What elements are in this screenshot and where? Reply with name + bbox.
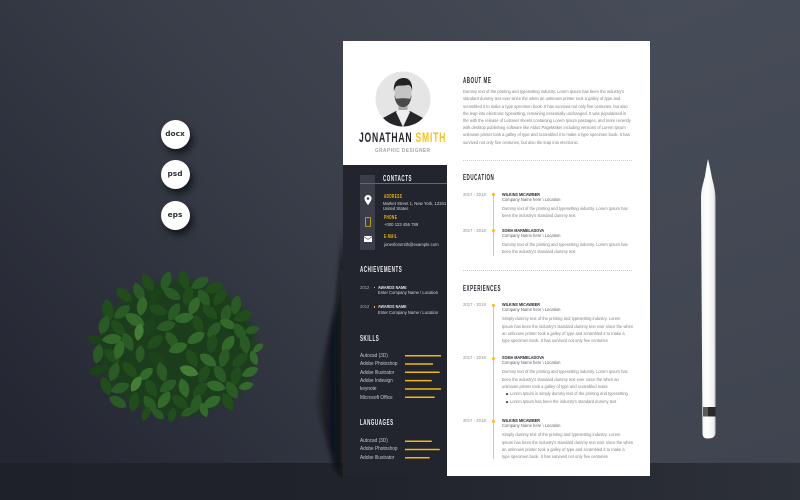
experience entry two: been the industry's standard dummy text ever since the when an (502, 376, 618, 382)
experiences section (463, 284, 633, 459)
about text (463, 89, 631, 145)
award two year: 2012 (360, 304, 369, 309)
experience entry one: an unknown printer took a galley of type and scrambled it to make a (502, 331, 624, 336)
format badges (161, 120, 196, 238)
education entry one: 2017 - 2018 (463, 192, 486, 196)
stylus pencil (701, 159, 716, 438)
profile portrait (376, 72, 430, 126)
about text: unknown printer took a galley of type and scrambled it to make a type specimen book. It has (463, 132, 630, 137)
experience entry two: Dummy text of the printing and typesetting industry. Lorem Ipsum has (502, 369, 627, 374)
award two place: Enter Company Name / Location (378, 310, 438, 314)
experience entry three: Ipsum has been the industry's standard dummy text ever since the when (502, 440, 633, 444)
experience entry three: type specimen book. It has survived not only five centuries (502, 454, 607, 459)
education entry two: 2017 - 2018 (463, 228, 486, 232)
job title: GRAPHIC DESIGNER (375, 148, 430, 154)
award one marker (374, 286, 375, 288)
education entry two: Dummy text of the printing and typesetting industry. Lorem Ipsum has (502, 242, 627, 247)
language labels: Adobe Illustrator (360, 455, 394, 461)
award two name: AWARDS NAME (378, 304, 407, 309)
experience entry three (463, 418, 633, 459)
experience entry one: WILKINS MICAWBER (502, 302, 539, 307)
experience entry three: Company Name here \ Location (502, 423, 560, 428)
skill labels: Adobe Illustrator (360, 370, 394, 376)
about heading: ABOUT ME (463, 76, 491, 84)
about text: Dummy text of the printing and typesetting industry. Lorem Ipsum has been the industry's (463, 89, 624, 94)
skills section (360, 334, 398, 400)
experience entry two: Lorem Ipsum has been the industry's standard dummy text (510, 398, 616, 404)
award one name: AWARDS NAME (378, 284, 407, 290)
experience entry one: Company Name here \ Location (502, 307, 560, 312)
skill labels: Microsoft Office (360, 394, 393, 400)
contacts section (360, 174, 447, 250)
phone label: PHONE (384, 215, 397, 221)
languages heading: LANGUAGES (360, 418, 394, 427)
experience entry three: WILKINS MICAWBER (502, 418, 539, 423)
skill labels (360, 353, 398, 400)
language bars (405, 440, 440, 458)
experience entry two (463, 355, 628, 404)
education heading: EDUCATION (463, 173, 494, 182)
education entry one: WILKINS MICAWBER (502, 192, 539, 196)
address line two: United States (383, 206, 408, 211)
address text: Market Street 1, New York, 12341 (383, 200, 446, 206)
icon strip (360, 175, 375, 250)
skill bars (405, 355, 441, 398)
experience entry one (463, 302, 633, 343)
badge: docx: docx (165, 128, 185, 138)
icon: phone (365, 217, 371, 227)
award two marker (374, 306, 375, 308)
icon: location pin (364, 195, 372, 205)
contacts heading: CONTACTS (383, 174, 412, 182)
award one year: 2012 (360, 284, 369, 290)
skill labels: keynote (360, 386, 377, 392)
education entry two (463, 228, 628, 254)
education entry one: Dummy text of the printing and typesetting industry. Lorem Ipsum has (502, 206, 627, 211)
name heading: JONATHAN SMITH (359, 130, 446, 146)
education entry one: been the industry's standard dummy text (502, 213, 575, 218)
experience entry two: Lorem Ipsum is simply dummy text of the printing and typesetting (510, 391, 627, 396)
skills heading: SKILLS (360, 334, 379, 343)
badge: eps (160, 200, 190, 230)
achievements section (360, 265, 438, 315)
about text: survived not only five centuries, but also the leap into electronic. (463, 140, 579, 145)
experience entry three: an unknown printer took a galley of type and scrambled it to make a (502, 447, 624, 452)
language labels (360, 438, 398, 461)
experiences heading: EXPERIENCES (463, 284, 501, 292)
education entry two: Company Name here \ Location (502, 233, 560, 238)
experience entry one: Simply dummy text of the printing and typesetting industry. Lorem (502, 316, 620, 321)
skill labels: Autocad (3D) (360, 353, 388, 359)
experience entry two: unknown printer took a galley of type and scrambled make (502, 384, 607, 389)
about text: with desktop publishing software like Aldus PageMaker including versions of Lorem Ipsum (463, 125, 626, 130)
about me section (463, 76, 631, 145)
contacts rule (360, 183, 447, 184)
experience entry one: type specimen book. It has survived not only five centuries (502, 338, 607, 343)
experience entry three: 2017 - 2018 (463, 418, 486, 423)
experience entry two: 2017 - 2018 (463, 355, 486, 360)
experience entry two: SOMA MARMELADOVA (502, 355, 544, 360)
about text: standard dummy text ever since the when an unknown printer took a galley of type and (463, 96, 620, 101)
skill labels: Adobe Photoshop (360, 361, 397, 367)
award one place: Enter Company Name / Location (378, 290, 438, 295)
education entry one (463, 192, 628, 218)
experience entry one: 2017 - 2018 (463, 302, 486, 307)
education entry one: Company Name here \ Location (502, 197, 560, 202)
language labels: Adobe Photoshop (360, 446, 397, 452)
about text: the with the release of Letraset sheets containing Lorem Ipsum passages, and more recently (463, 118, 631, 123)
address label: ADDRESS (384, 194, 402, 200)
about text: the leap into electronic typesetting, remaining essentially unchanged. It was popularised in (463, 111, 626, 116)
education entry two: SOMA MARMELADOVA (502, 228, 544, 232)
education entry two: been the industry's standard dummy text (502, 249, 575, 254)
resume page (343, 41, 650, 476)
email label: E-MAIL (384, 234, 397, 240)
badge: docx (160, 120, 190, 148)
sidebar panel (343, 165, 447, 476)
experience entry three: Simply dummy text of the printing and typesetting industry. Lorem (502, 432, 620, 437)
languages section (360, 418, 398, 461)
phone number: +000 123 456 789 (384, 222, 418, 227)
achievements heading: ACHIEVEMENTS (360, 265, 402, 274)
badge: psd (160, 160, 190, 188)
badge: psd: psd (168, 168, 182, 178)
education section (463, 173, 628, 256)
icon: mail (364, 236, 372, 242)
about text: scrambled it to make a type specimen book. It has survived not only five centuries, but also (463, 104, 628, 109)
skill labels: Adobe Indesign (360, 378, 393, 384)
language labels: Autocad (3D) (360, 438, 388, 444)
education timeline (493, 194, 494, 256)
email address: jonesforsmith@example.com (384, 242, 438, 246)
experience entry two: Company Name here \ Location (502, 360, 560, 365)
experience entry one: Ipsum has been the industry's standard dummy text ever since the when (502, 324, 633, 328)
experiences timeline (493, 305, 494, 459)
badge: eps: eps (168, 210, 182, 218)
